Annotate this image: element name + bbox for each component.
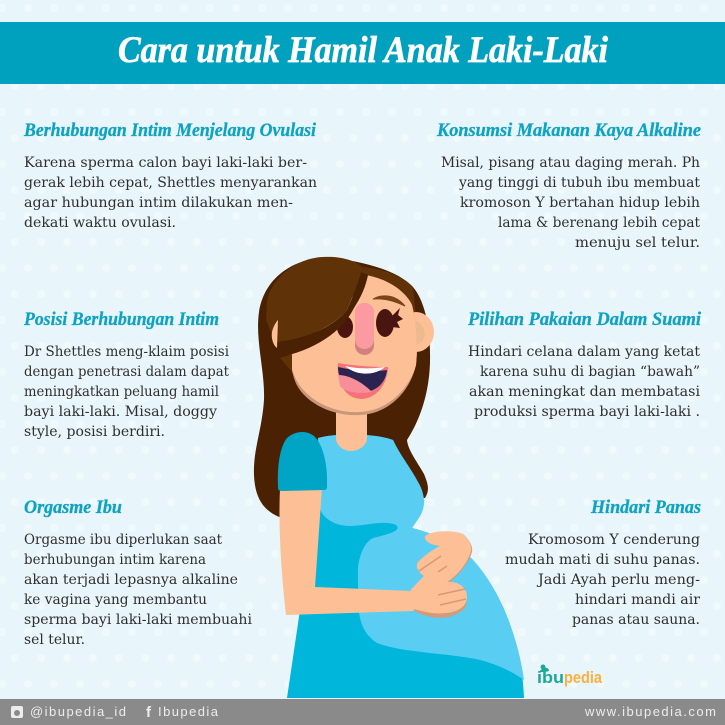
mouth — [338, 363, 388, 399]
text block: Pilihan Pakaian Dalam Suami: Hindari celana dalam yang ketat — [468, 344, 700, 360]
text block: Pilihan Pakaian Dalam Suami — [467, 309, 702, 420]
neck — [336, 405, 367, 451]
logo: ibupedia: ibu — [537, 668, 564, 687]
icon: facebook: f — [146, 704, 152, 721]
text block: Posisi Berhubungan Intim: style, posisi berdiri. — [24, 424, 165, 440]
illustration: pregnant woman — [254, 257, 524, 698]
text block: Hindari Panas: hindari mandi air — [575, 592, 700, 608]
face — [290, 275, 417, 415]
crown hair — [360, 267, 416, 316]
website: www.ibupedia.com — [584, 704, 716, 719]
title: Cara untuk Hamil Anak Laki-Laki — [118, 30, 609, 71]
dress chest and belly highlight — [318, 434, 524, 680]
logo: ibupedia: pedia — [564, 668, 602, 687]
text block: Hindari Panas: Kromosom Y cenderung — [528, 532, 700, 548]
text block: Konsumsi Makanan Kaya Alkaline — [436, 120, 702, 251]
icon: instagram — [11, 706, 23, 718]
text block: Orgasme Ibu: berhubungan intim karena — [24, 552, 206, 568]
eyebrow — [373, 296, 405, 306]
facebook name: Ibupedia — [158, 704, 219, 719]
text block: Orgasme Ibu: ke vagina yang membantu — [24, 592, 207, 608]
text block: Posisi Berhubungan Intim — [23, 309, 230, 440]
text block: Pilihan Pakaian Dalam Suami: produksi sperma bayi laki-laki . — [474, 404, 700, 420]
text block: Pilihan Pakaian Dalam Suami: karena suhu di bagian “bawah” — [480, 364, 700, 380]
eyes — [337, 308, 403, 338]
text block: Posisi Berhubungan Intim: meningkatkan peluang hamil — [24, 384, 219, 400]
text block: Orgasme Ibu: Orgasme ibu diperlukan saat — [24, 532, 222, 548]
text block: Orgasme Ibu: sperma bayi laki-laki membuahi — [24, 612, 253, 628]
text block: Orgasme Ibu — [24, 497, 253, 648]
sleeve — [278, 432, 327, 491]
back hair — [254, 257, 430, 518]
text block: Berhubungan Intim Menjelang Ovulasi: Berhubungan Intim Menjelang Ovulasi — [23, 120, 317, 141]
text block: Hindari Panas: Hindari Panas — [590, 497, 701, 518]
text block: Hindari Panas: Jadi Ayah perlu meng- — [536, 572, 700, 588]
text block: Berhubungan Intim Menjelang Ovulasi: agar hubungan intim dilakukan men- — [24, 195, 293, 211]
ear — [398, 312, 434, 352]
text block: Konsumsi Makanan Kaya Alkaline: Misal, pisang atau daging merah. Ph — [441, 155, 700, 171]
text block: Berhubungan Intim Menjelang Ovulasi: Karena sperma calon bayi laki-laki ber- — [24, 155, 307, 171]
text block: Posisi Berhubungan Intim: Posisi Berhubungan Intim — [23, 309, 219, 330]
footer bar — [0, 699, 725, 725]
arm — [279, 488, 414, 615]
text block: Orgasme Ibu: sel telur. — [24, 632, 85, 648]
text block: Konsumsi Makanan Kaya Alkaline: yang tinggi di tubuh ibu membuat — [458, 175, 700, 191]
text block: Posisi Berhubungan Intim: dengan penetrasi dalam dapat — [24, 364, 229, 380]
logo: ibupedia — [537, 664, 602, 687]
nose — [355, 303, 374, 355]
text block: Pilihan Pakaian Dalam Suami: Pilihan Pakaian Dalam Suami — [467, 309, 702, 330]
text block: Konsumsi Makanan Kaya Alkaline: Konsumsi Makanan Kaya Alkaline — [436, 120, 702, 141]
instagram handle: @ibupedia_id — [30, 704, 126, 719]
text block: Hindari Panas — [505, 497, 701, 628]
text block: Hindari Panas: mudah mati di suhu panas. — [505, 552, 700, 568]
text block: Hindari Panas: panas atau sauna. — [572, 612, 700, 628]
text block: Konsumsi Makanan Kaya Alkaline: menuju sel telur. — [575, 235, 700, 251]
text block: Posisi Berhubungan Intim: Dr Shettles meng-klaim posisi — [24, 344, 230, 360]
title banner — [0, 22, 725, 84]
text block: Berhubungan Intim Menjelang Ovulasi: dekati waktu ovulasi. — [24, 215, 176, 231]
front hair bangs — [266, 257, 368, 372]
text block: Posisi Berhubungan Intim: bayi laki-laki. Misal, doggy — [24, 404, 217, 420]
text block: Orgasme Ibu: akan terjadi lepasnya alkaline — [24, 572, 238, 588]
hands — [410, 531, 472, 618]
text block: Konsumsi Makanan Kaya Alkaline: kromoson Y bertahan hidup lebih — [460, 195, 700, 211]
text block: Berhubungan Intim Menjelang Ovulasi: gerak lebih cepat, Shettles menyarankan — [24, 175, 317, 191]
text block: Berhubungan Intim Menjelang Ovulasi — [23, 120, 317, 231]
text block: Konsumsi Makanan Kaya Alkaline: lama & berenang lebih cepat — [498, 215, 700, 231]
text block: Pilihan Pakaian Dalam Suami: akan meningkat dan membatasi — [469, 384, 701, 400]
text block: Orgasme Ibu: Orgasme Ibu — [24, 497, 122, 518]
dress body — [287, 434, 524, 698]
